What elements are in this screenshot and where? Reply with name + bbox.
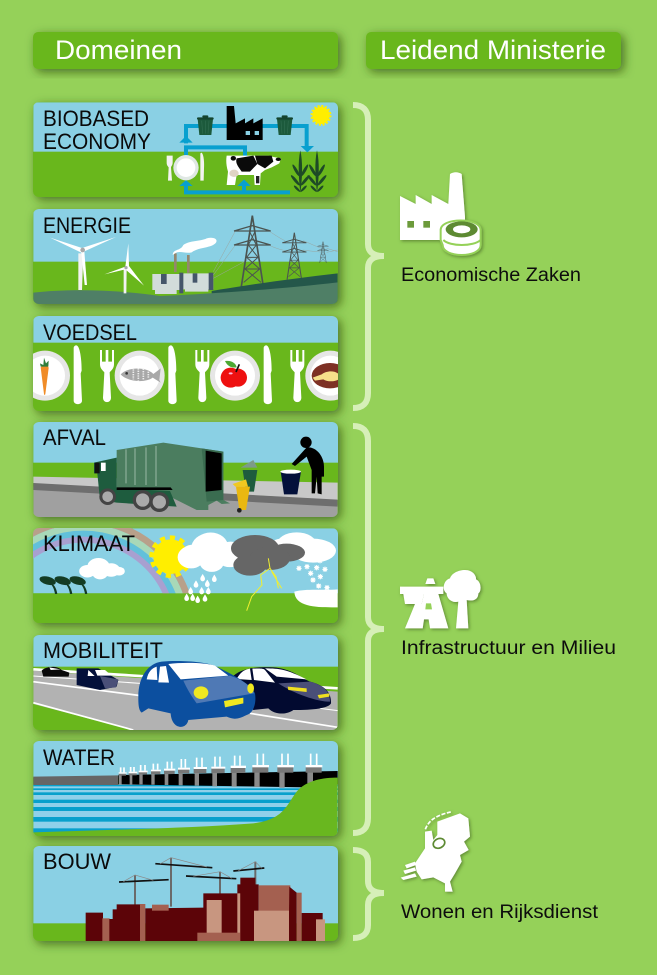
barrier dark xyxy=(118,771,338,787)
barrier caps xyxy=(119,754,322,774)
icon: sun xyxy=(312,106,330,125)
label: WATER xyxy=(43,745,115,770)
icon: dark car xyxy=(231,667,331,714)
icon: plates xyxy=(20,351,355,401)
icon: lightning xyxy=(247,558,282,611)
ground xyxy=(33,593,338,624)
icon: power plant xyxy=(152,238,217,294)
road xyxy=(33,487,338,518)
heading: Leidend Ministerie xyxy=(366,32,621,69)
bracket: Infrastructuur en Milieu xyxy=(353,426,384,833)
panel: Biobased Economy xyxy=(33,102,338,197)
panel: Klimaat xyxy=(29,524,348,632)
icon: raindrops xyxy=(184,574,217,603)
icon: waste bins xyxy=(197,115,293,135)
icon: cow xyxy=(226,156,281,185)
icon: yellow bin xyxy=(233,479,250,513)
green bank xyxy=(33,778,338,838)
heading: Domeinen: Domeinen xyxy=(55,35,182,65)
icon: crops xyxy=(290,150,327,193)
dam road xyxy=(33,775,118,785)
icon: pylons xyxy=(234,216,328,287)
icon: small black car xyxy=(42,667,69,677)
road markings xyxy=(33,669,338,730)
icon: fish xyxy=(121,368,161,383)
panel: Energie xyxy=(33,209,338,305)
icon: roast meat xyxy=(312,363,338,388)
icon: storm surge barrier piers xyxy=(119,767,313,788)
icon: apple xyxy=(221,361,247,388)
icon: garbage truck xyxy=(94,443,230,512)
icon: snowflakes xyxy=(296,558,330,590)
icon: carrot xyxy=(40,358,49,395)
label: ENERGIE xyxy=(43,213,131,238)
icon: buildings xyxy=(86,878,325,942)
text: Infrastructuur en Milieu: Infrastructuur en Milieu xyxy=(401,638,616,659)
label: BOUW xyxy=(43,849,111,874)
foreground hill xyxy=(33,282,338,305)
water xyxy=(33,784,338,834)
label xyxy=(43,106,151,154)
icon: plate and cutlery xyxy=(167,153,204,181)
label: BIOBASED xyxy=(43,106,149,131)
icon: cranes xyxy=(119,858,264,910)
bracket: Wonen en Rijksdienst xyxy=(353,850,384,938)
label: VOEDSEL xyxy=(43,320,137,345)
label: ECONOMY xyxy=(43,129,151,154)
icon: person with bucket xyxy=(280,437,324,494)
icon: factory with coins xyxy=(400,172,481,255)
panel: Bouw xyxy=(33,846,338,942)
icon: windblown trees xyxy=(39,575,87,594)
curb xyxy=(33,483,338,507)
sidewalk xyxy=(33,477,338,500)
panel: Afval xyxy=(33,422,338,518)
icon: recycling arrows xyxy=(186,126,307,192)
panel: Water xyxy=(33,741,338,838)
icon: white cloud back xyxy=(268,532,336,563)
water stripes xyxy=(33,785,338,833)
icon: arrowheads xyxy=(179,136,314,186)
hill xyxy=(212,273,338,303)
icon: blue car xyxy=(138,661,255,727)
power lines xyxy=(213,232,338,278)
text: Economische Zaken: Economische Zaken xyxy=(401,265,581,286)
icon: factory xyxy=(227,106,263,140)
text: Wonen en Rijksdienst: Wonen en Rijksdienst xyxy=(401,902,599,923)
icon: cloud small xyxy=(79,558,125,579)
icon: navy car xyxy=(77,668,118,690)
road xyxy=(33,671,338,731)
icon: road and tree xyxy=(400,570,481,628)
pier caps xyxy=(119,767,322,776)
label: MOBILITEIT xyxy=(43,638,163,663)
icon: thunder cloud xyxy=(231,535,305,576)
bracket: Economische Zaken xyxy=(353,105,384,408)
icon: map of the Netherlands xyxy=(401,812,470,892)
icon: green bin xyxy=(241,460,257,492)
heading: Domeinen xyxy=(33,32,338,69)
panel: Mobiliteit xyxy=(33,635,338,731)
icon: wind turbines xyxy=(50,237,144,293)
icon: rain cloud xyxy=(178,532,238,572)
heading: Leidend Ministerie: Leidend Ministerie xyxy=(380,35,606,65)
label: KLIMAAT xyxy=(43,531,135,556)
label: AFVAL xyxy=(43,425,106,450)
panel: Voedsel xyxy=(20,316,355,411)
icon: sun xyxy=(152,538,189,575)
icon: cutlery xyxy=(74,345,304,404)
icon: snow pile xyxy=(294,589,338,607)
rainbow xyxy=(33,528,189,594)
